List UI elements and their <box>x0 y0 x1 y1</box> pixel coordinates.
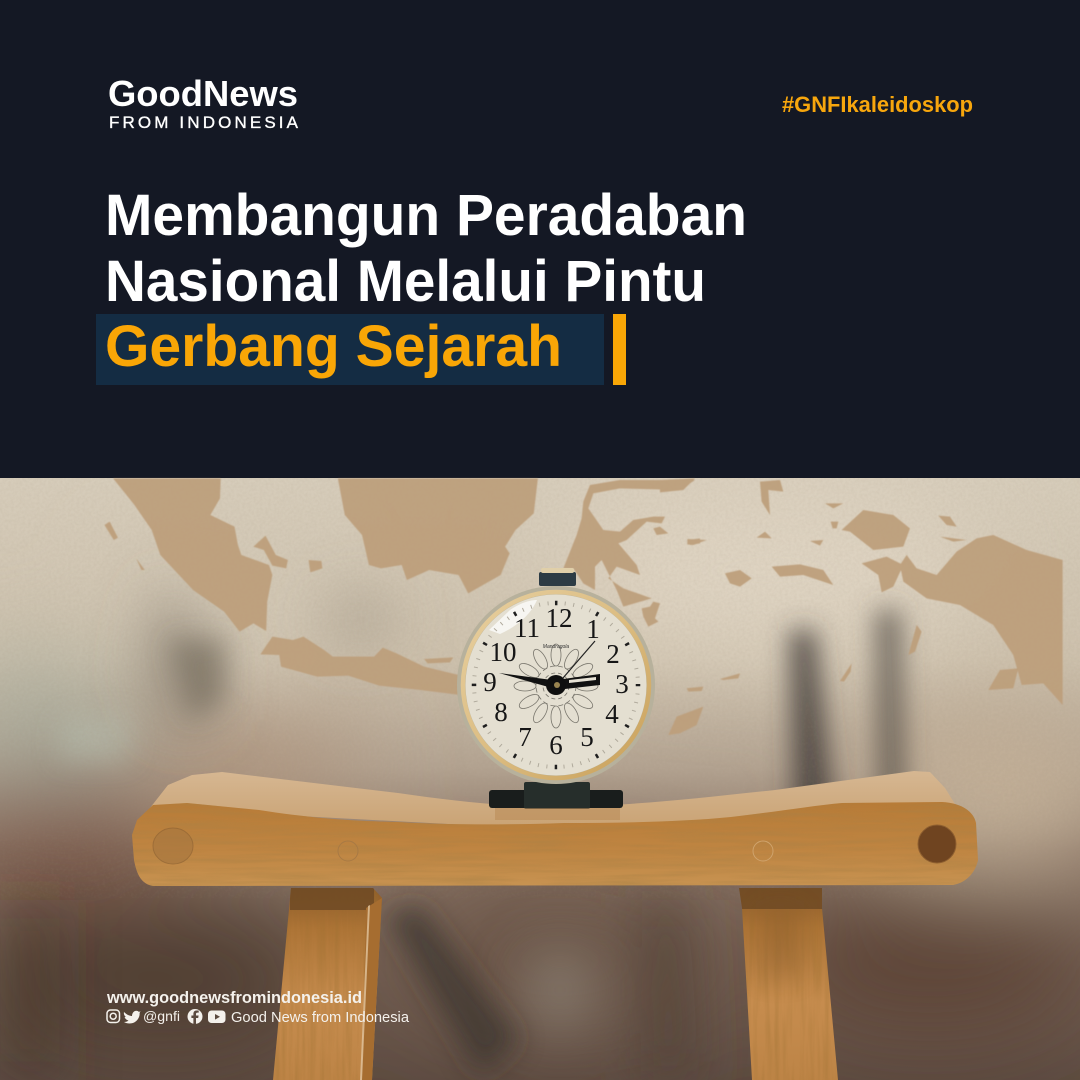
map: Kalimantan <box>338 478 538 593</box>
stool legs <box>270 885 845 1080</box>
map: eastern islands and Papua <box>660 478 1063 735</box>
clock numerals: 6 <box>549 730 563 760</box>
title: Membangun Peradaban <box>105 183 747 248</box>
logo: GoodNews from Indonesia: GoodNews <box>108 73 298 114</box>
clock numerals: 3 <box>615 669 629 699</box>
map: Java <box>260 637 460 695</box>
title highlight box <box>96 314 604 385</box>
cursor bar <box>613 314 626 385</box>
icon: facebook <box>188 1009 202 1024</box>
clock numerals: 2 <box>606 639 620 669</box>
clock numerals: 5 <box>580 722 594 752</box>
clock numerals <box>483 603 629 760</box>
title <box>96 183 747 385</box>
map: Sulawesi <box>563 480 700 627</box>
clock numerals: 1 <box>586 614 600 644</box>
clock numerals: 12 <box>546 603 572 633</box>
left peg <box>153 828 193 864</box>
footer website: www.goodnewsfromindonesia.id <box>106 988 362 1007</box>
icon: twitter <box>124 1011 140 1024</box>
handle: @gnfi <box>143 1008 180 1024</box>
stool seat <box>125 771 985 895</box>
clock shadow on seat <box>495 808 620 820</box>
clock numerals: 7 <box>518 722 532 752</box>
map: Sumatra <box>104 478 322 632</box>
clock ticks <box>474 603 638 767</box>
logo: GoodNews from Indonesia <box>108 73 299 132</box>
clock gold ring <box>463 592 649 778</box>
footer social row <box>107 1008 410 1026</box>
left leg <box>270 885 385 1080</box>
right leg <box>739 888 838 1080</box>
seat front face <box>132 802 978 886</box>
seat top surface <box>150 771 955 830</box>
header panel <box>0 0 1080 478</box>
hashtag: #GNFIkaleidoskop <box>782 92 973 117</box>
logo: GoodNews from Indonesia: FROM INDONESIA <box>109 113 299 132</box>
clock mandala ornament <box>514 644 598 728</box>
photo background: blurred paper wall <box>0 478 1080 1080</box>
clock body <box>457 586 655 784</box>
clock stand foot <box>489 782 623 809</box>
map of Indonesia <box>104 478 1063 735</box>
clock glass highlight <box>489 600 537 634</box>
clock numerals: 8 <box>494 697 508 727</box>
clock face <box>466 594 646 776</box>
alarm clock <box>457 568 655 820</box>
inner dowels <box>338 841 358 861</box>
clock numerals: 11 <box>514 613 540 643</box>
title: Nasional Melalui Pintu <box>105 249 706 314</box>
title highlight text: Gerbang Sejarah <box>105 314 562 379</box>
clock numerals: 10 <box>490 637 516 667</box>
clock brand label: Mandragola <box>543 644 569 650</box>
right peg <box>918 825 956 863</box>
icon: youtube <box>208 1010 226 1023</box>
page name: Good News from Indonesia <box>231 1009 410 1026</box>
clock hands <box>499 641 600 695</box>
clock numerals: 4 <box>605 699 619 729</box>
clock top knob <box>539 568 576 586</box>
icon: instagram <box>107 1010 120 1022</box>
clock numerals: 9 <box>483 667 497 697</box>
